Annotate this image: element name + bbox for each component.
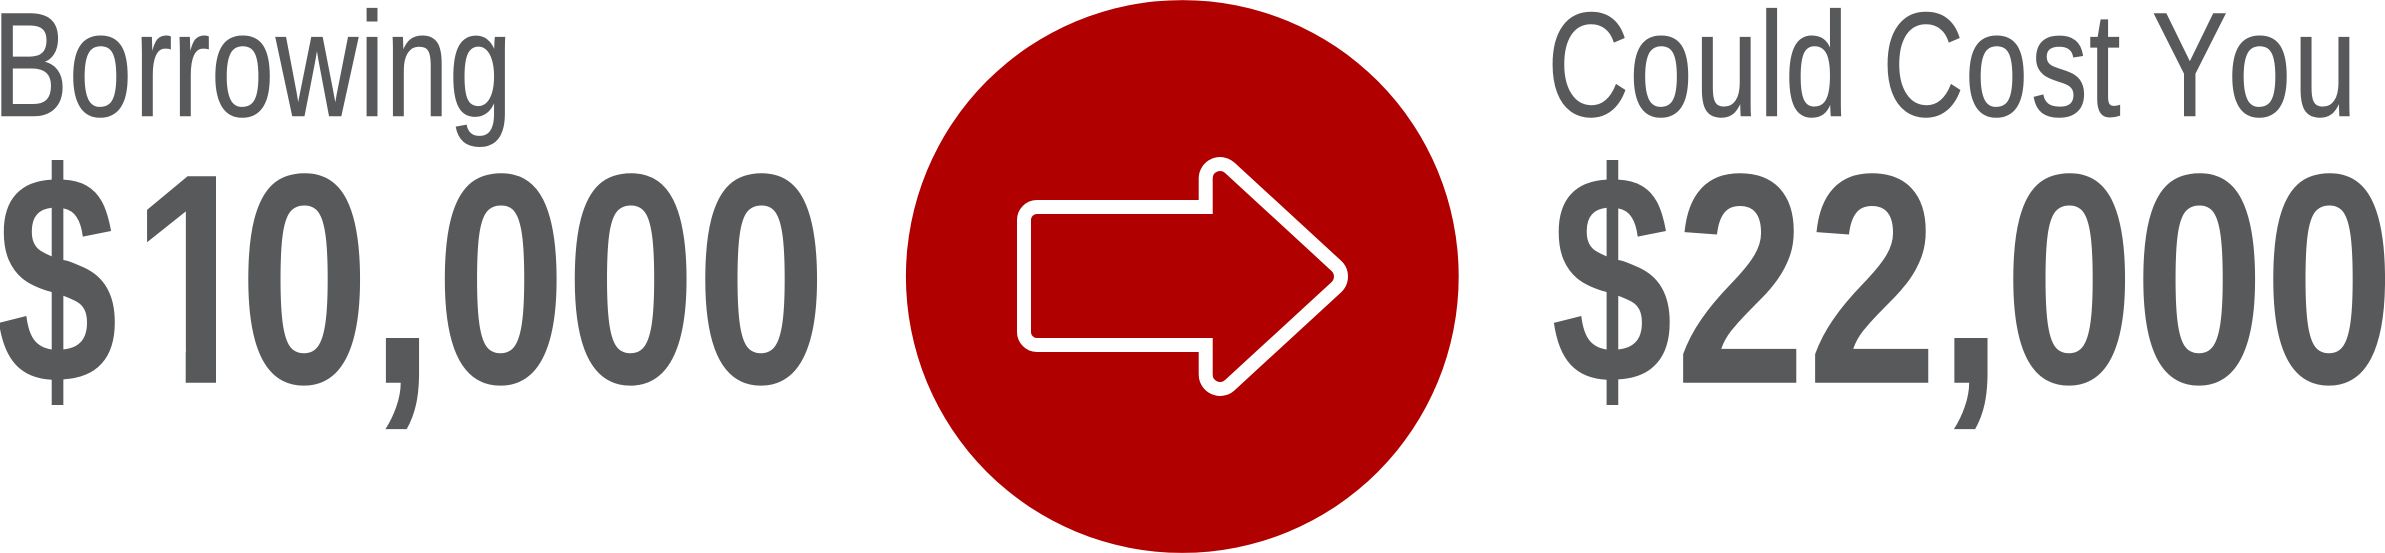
white outlined arrow (1024, 164, 1341, 389)
red circle (906, 0, 1459, 553)
amount: $10,000: 0,000 (239, 112, 827, 447)
icon: red circle with right arrow (906, 0, 1459, 553)
amount: $22,000: 22,000 (1675, 112, 2385, 447)
amount: $10,000 (0, 160, 818, 430)
amount: $22,000: $ (1551, 111, 1673, 447)
amount: $10,000: 1 (131, 112, 262, 447)
